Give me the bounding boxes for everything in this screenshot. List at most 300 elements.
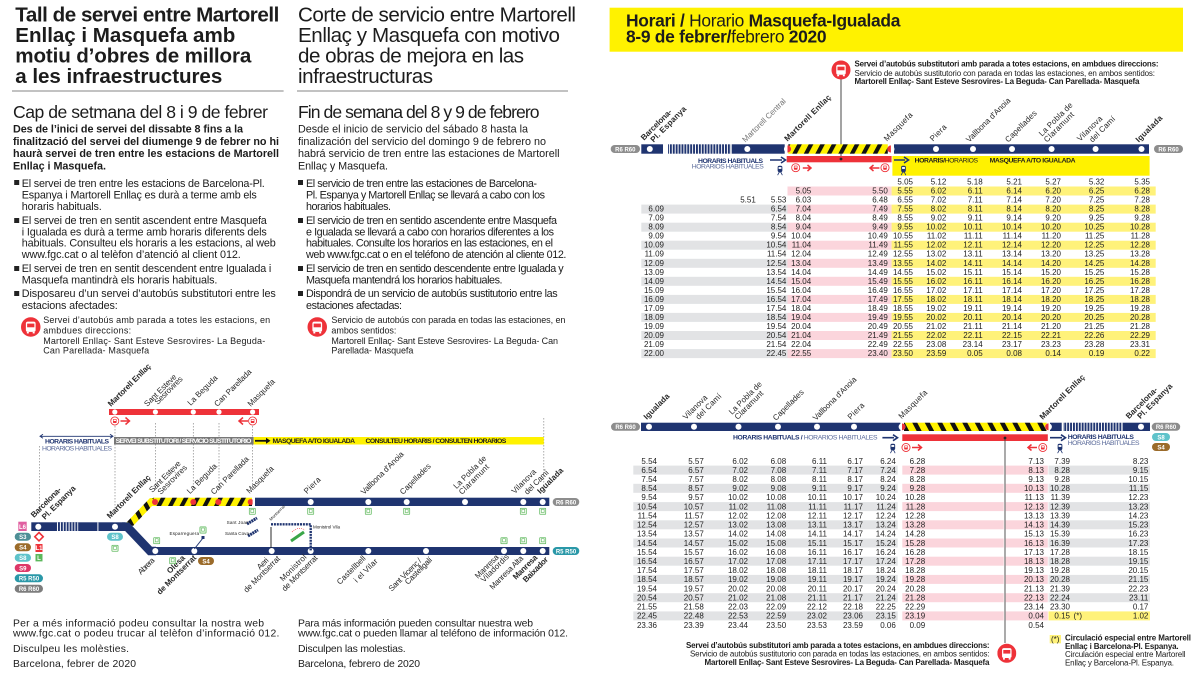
timetable: direction Igualada: 20.09	[644, 331, 665, 340]
bullet list: Spanish: El servicio de tren entre las estaciones de Barcelona-	[306, 178, 537, 190]
timetable: direction Igualada: 10.09	[644, 241, 665, 250]
timetable: direction Barcelona: 12.17	[843, 512, 864, 520]
intro paragraph: Catalan: finalització del servei del diumenge 9 de febrer no hi	[13, 136, 279, 148]
timetable: direction Igualada: 7.54	[771, 214, 787, 223]
bullet list: Spanish: horarios habituales.	[306, 201, 391, 213]
station labels: direction Barcelona: Martorell Enllaç	[1038, 372, 1087, 421]
timetable: direction Igualada: 5.27	[1045, 178, 1062, 186]
timetable: direction Barcelona: 14.08	[766, 530, 787, 539]
title: Catalan: motiu d’obres de millora	[15, 44, 252, 68]
title: Catalan: Enllaç i Masquefa amb	[15, 24, 235, 47]
timetable: direction Igualada: 20.55	[893, 322, 914, 331]
timetable: direction Igualada: 10.02	[926, 223, 947, 232]
timetable: direction Barcelona: 8.24	[880, 475, 896, 484]
timetable: direction Barcelona: 20.54	[637, 594, 658, 602]
timetable: direction Barcelona: 19.02	[728, 575, 749, 584]
timetable: direction Igualada: 5.18	[967, 178, 983, 186]
timetable: direction Barcelona: 22.13	[1024, 594, 1045, 602]
footer: Spanish: Para más información pueden consultar nuestra web	[298, 619, 533, 630]
bus callout: Catalan: Martorell Enllaç- Sant Esteve Sesrovires- La Beguda-	[43, 336, 265, 346]
timetable: direction Barcelona: 23.36	[637, 621, 658, 630]
schedule band: MASQUEFA A/TO IGUALADA	[272, 438, 355, 445]
timetable: direction Igualada: 7.02	[931, 196, 947, 205]
station labels: upper: Barcelona-	[29, 485, 63, 519]
timetable: direction Barcelona: 9.17	[847, 484, 864, 493]
timetable: direction Igualada: 7.04	[796, 205, 812, 214]
timetable: direction Barcelona: 22.18	[843, 603, 864, 612]
timetable: direction Igualada: 23.40	[868, 349, 888, 358]
timetable: direction Barcelona: 16.08	[766, 548, 787, 557]
timetable: direction Igualada: 23.50	[893, 349, 914, 358]
bus note: Masquefa direction: Servicio de autobús sustitutorio con parada en todas las estaciones, en ambos sentidos:	[854, 69, 1155, 78]
footer: Spanish: www.fgc.cat o pueden llamar al teléfono de información 012.	[297, 628, 568, 639]
timetable: direction Barcelona: 10.54	[637, 502, 658, 511]
timetable: direction Barcelona: 20.28	[1050, 575, 1071, 584]
icon: bus with leader line	[832, 60, 850, 158]
timetable: direction Igualada: 12.54	[766, 259, 787, 268]
timetable: direction Barcelona: 17.54	[637, 566, 658, 575]
station labels: lower: de Montserrat	[155, 553, 198, 596]
bus callout: Catalan	[43, 315, 270, 356]
Montserrat branches	[170, 503, 340, 551]
timetable: direction Igualada: 15.49	[868, 277, 888, 286]
bullet list: Spanish: El servicio de tren en sentido descendente entre Igualada y	[306, 263, 564, 275]
timetable: direction Igualada: 8.20	[1045, 205, 1062, 214]
timetable: direction Igualada: 16.02	[926, 277, 947, 286]
timetable: direction Igualada: 0.08	[1006, 349, 1023, 358]
station labels: upper: del Camí	[522, 468, 551, 496]
timetable: direction Barcelona: 14.11	[808, 530, 828, 539]
line legend pills: R6 R60	[19, 587, 40, 593]
timetable: direction Barcelona: 11.15	[1129, 484, 1149, 493]
timetable: direction Igualada: 8.11	[968, 205, 983, 214]
timetable: direction Igualada: 9.11	[968, 214, 983, 223]
line legend pills: S8	[111, 535, 119, 541]
timetable: direction Barcelona: 6.24	[880, 457, 896, 466]
timetable: direction Barcelona: 9.13	[1028, 475, 1045, 484]
timetable: direction Barcelona: 15.54	[637, 548, 658, 557]
timetable: direction Barcelona: 13.28	[905, 521, 926, 530]
timetable: direction Barcelona: 17.02	[728, 557, 749, 566]
service strip: direction Barcelona: HORARIOS HABITUALES	[1068, 440, 1140, 447]
timetable: direction Igualada: 10.55	[893, 232, 914, 241]
timetable: direction Barcelona: 7.24	[880, 466, 896, 475]
timetable: direction Barcelona: 17.23	[1128, 539, 1149, 548]
timetable: direction Igualada: 20.04	[791, 322, 812, 331]
dashed guide lines	[39, 418, 544, 510]
station labels: direction Igualada: Martorell Central	[740, 97, 788, 144]
timetable: direction Barcelona: 17.17	[843, 557, 864, 566]
timetable: direction Barcelona: 8.02	[732, 475, 749, 484]
timetable: direction Barcelona: 0.17	[1133, 603, 1149, 612]
replacement bus bar	[109, 409, 259, 425]
timetable: direction Igualada: 16.25	[1084, 277, 1105, 286]
station labels: direction Igualada: Pl. Espanya	[649, 104, 689, 144]
station labels: direction Barcelona	[642, 372, 1175, 422]
timetable: direction Barcelona: 5.54	[641, 457, 658, 466]
timetable: direction Igualada: 19.04	[791, 313, 812, 322]
timetable: direction Barcelona: 8.28	[910, 475, 926, 484]
station labels: direction Barcelona: Vallbona d'Anoia	[811, 375, 859, 422]
timetable: direction Barcelona: 7.57	[688, 475, 704, 484]
timetable: direction Barcelona: 23.15	[876, 612, 896, 621]
timetable: direction Barcelona: 22.09	[766, 603, 787, 612]
service strip: direction Barcelona	[733, 433, 1170, 453]
line legend pills	[15, 498, 579, 593]
timetable: direction Igualada: 0.14	[1045, 349, 1062, 358]
line legend pills: L6	[19, 525, 27, 531]
footer: Spanish	[297, 619, 568, 670]
bullet list: Catalan: habituals. Consulteu els horaris a les estacions, al web	[22, 238, 276, 250]
timetable: direction Igualada: 19.54	[766, 322, 787, 331]
timetable: direction Igualada: 13.14	[1002, 250, 1023, 259]
footer: Spanish: Disculpen las molestias.	[298, 644, 406, 655]
timetable: direction Barcelona: 9.24	[880, 484, 896, 493]
bus bar station labels: Sesrovires	[153, 375, 185, 406]
timetable: direction Barcelona: 23.59	[843, 621, 864, 630]
line legend pills: S9	[19, 566, 27, 572]
timetable: direction Barcelona: 16.28	[905, 548, 926, 557]
timetable: direction Barcelona: 12.02	[728, 512, 749, 520]
timetable: direction Igualada: 6.14	[1006, 186, 1023, 196]
station labels: lower: Abrera	[136, 556, 157, 576]
Montserrat branches: Montserrat	[268, 503, 286, 522]
timetable: direction Barcelona: 22.48	[684, 612, 704, 621]
timetable: direction Barcelona: 19.11	[808, 575, 828, 584]
footnote: special service: Enllaç y Barcelona-Pl. Espanya.	[1065, 659, 1174, 668]
timetable: direction Igualada: 14.54	[766, 277, 787, 286]
timetable: direction Barcelona: 14.17	[843, 530, 864, 539]
timetable: direction Barcelona: 22.59	[766, 612, 787, 621]
timetable: direction Barcelona: 13.11	[808, 521, 828, 530]
timetable: direction Barcelona: 10.11	[808, 493, 828, 502]
bus note: Barcelona direction: Servei d’autobús substitutori amb parada a totes estacions, en ambdues direccions:	[686, 641, 990, 650]
timetable: direction Barcelona: (*)	[1074, 612, 1082, 621]
bus note: Barcelona direction: Servicio de autobús sustitutorio con parada en todas las estaciones, en ambos sentidos:	[690, 650, 990, 659]
timetable: direction Barcelona: 16.54	[637, 557, 658, 566]
timetable: direction Barcelona: 0.09	[910, 621, 926, 630]
bus bar station labels: Can Parellada	[212, 367, 254, 408]
bus note: Masquefa direction	[854, 60, 1158, 86]
station labels: direction Barcelona: La Pobla de	[727, 379, 764, 416]
timetable: direction Igualada: 19.09	[644, 322, 665, 331]
timetable: direction Igualada: 19.02	[926, 304, 947, 313]
Montserrat branches: Monistrol Vila	[313, 524, 340, 530]
station labels: upper: Masquefa	[245, 464, 276, 495]
timetable: direction Igualada: 15.14	[1002, 268, 1023, 277]
timetable: direction Barcelona: 21.39	[1050, 584, 1071, 593]
bullet list: Spanish: Dispondrá de un servicio de autobús sustitutorio entre las	[306, 288, 558, 300]
timetable: direction Barcelona: 19.28	[905, 575, 926, 584]
timetable: direction Barcelona: 6.02	[732, 457, 749, 466]
service strip: direction Barcelona: S4	[1157, 445, 1165, 451]
timetable: direction Igualada: 6.55	[897, 196, 914, 205]
station labels: direction Igualada: Masquefa	[882, 110, 915, 143]
timetable: direction Igualada: 8.04	[796, 214, 812, 223]
timetable: direction Barcelona: 17.28	[905, 557, 926, 566]
timetable: direction Igualada: 16.28	[1130, 277, 1151, 286]
station labels: direction Igualada: Claramunt	[1042, 110, 1077, 144]
bullet list: Catalan: www.fgc.cat o al telèfon d’atenció al client 012.	[21, 249, 241, 261]
line legend pills: S4	[202, 559, 210, 565]
timetable: direction Igualada: 22.11	[963, 331, 983, 340]
timetable: direction Barcelona: 18.54	[637, 575, 658, 584]
timetable: direction Barcelona: 10.08	[766, 493, 787, 502]
timetable: direction Barcelona: 22.45	[637, 612, 658, 621]
bus bar station labels: Martorell Enllaç	[106, 361, 153, 408]
header band: timetable title: Horari / Horario Masquefa-Igualada	[626, 11, 901, 31]
timetable: direction Barcelona: 18.02	[728, 566, 749, 575]
station labels: direction Igualada: Martorell Enllaç	[783, 93, 833, 143]
timetable: direction Barcelona: 8.54	[641, 484, 658, 493]
footnote: special service: Circulació especial entre Martorell	[1065, 634, 1191, 643]
timetable: direction Barcelona: 8.08	[771, 475, 787, 484]
station labels: lower: Manresa Alta	[488, 554, 526, 591]
bus callout: Spanish: Servicio de autobús con parada en todas las estaciones, en	[331, 315, 565, 325]
line diagram: direction Barcelona	[611, 423, 1180, 431]
bus note: Barcelona direction	[686, 641, 990, 667]
timetable: direction Barcelona: 20.08	[766, 584, 787, 593]
footnote: special service: Circulación especial entre Martorell	[1065, 650, 1186, 659]
timetable: direction Barcelona: 18.15	[1128, 548, 1149, 557]
line legend pills: L	[37, 556, 41, 562]
bus note: Masquefa direction: Martorell Enllaç- Sant Esteve Sesrovires- La Beguda- Can Parellada- Masquefa	[854, 77, 1140, 86]
station labels: upper: La Pobla de	[452, 454, 489, 491]
line diagram: direction Igualada	[611, 144, 1183, 154]
timetable: direction Igualada: 13.02	[926, 250, 947, 259]
timetable: direction Igualada: 22.02	[926, 331, 947, 340]
station labels: direction Igualada: La Pobla de	[1037, 100, 1075, 138]
timetable: direction Igualada: 7.25	[1089, 196, 1105, 205]
timetable: direction Barcelona: 15.11	[808, 539, 828, 548]
timetable: direction Igualada: 12.55	[893, 250, 914, 259]
timetable: direction Igualada: 19.25	[1084, 304, 1105, 313]
bullet list: Spanish: habituales. Consulte los horarios en las estaciones, en el	[306, 238, 553, 250]
panel: Catalan notice	[12, 4, 284, 355]
timetable: direction Igualada: 21.25	[1084, 322, 1105, 331]
bus bar station labels: Sant Esteve	[142, 372, 179, 408]
timetable: direction Igualada: 16.14	[1002, 277, 1023, 286]
timetable: direction Barcelona: 23.44	[728, 621, 749, 630]
timetable: direction Barcelona: 7.08	[771, 466, 787, 475]
timetable: direction Igualada: 12.28	[1130, 241, 1151, 250]
line: main stem and lower branch	[31, 522, 549, 555]
timetable: direction Barcelona: 6.54	[641, 466, 658, 475]
timetable: direction Barcelona: 8.57	[688, 484, 704, 493]
timetable: direction Igualada: 16.20	[1041, 277, 1062, 286]
timetable: direction Igualada: 22.21	[1041, 331, 1062, 340]
station labels: lower: i el Vilar	[352, 557, 380, 584]
station labels: upper: Piera	[302, 475, 323, 496]
timetable: direction Igualada: 23.17	[1002, 340, 1023, 349]
timetable: direction Barcelona: 9.28	[1054, 475, 1071, 484]
timetable: direction Igualada: 21.28	[1130, 322, 1151, 331]
timetable: direction Igualada: 12.04	[791, 250, 812, 259]
timetable: direction Barcelona: 19.13	[1024, 566, 1045, 575]
timetable: direction Barcelona: 18.28	[1050, 557, 1071, 566]
timetable: direction Igualada: 23.08	[926, 340, 947, 349]
timetable: direction Barcelona: 9.11	[812, 484, 828, 493]
timetable: direction Igualada: 18.09	[644, 313, 665, 322]
timetable: direction Igualada: 12.25	[1084, 241, 1105, 250]
timetable: direction Igualada: 15.04	[791, 277, 812, 286]
timetable: direction Igualada: 6.25	[1089, 186, 1105, 196]
timetable: direction Barcelona: 15.23	[1128, 521, 1149, 530]
bullet list: Catalan: Masquefa mantindrà els horaris habituals.	[22, 274, 217, 286]
service strip: direction Barcelona: HORARIS HABITUALS / HORARIOS HABITUALES	[733, 434, 878, 441]
service strip: direction Igualada: HORARIS/HORARIOS	[915, 158, 978, 164]
timetable: direction Barcelona: 11.02	[729, 502, 749, 511]
timetable: direction Igualada: 18.25	[1084, 295, 1105, 304]
timetable: direction Barcelona: 20.28	[905, 584, 926, 593]
bullet list: Spanish: web www.fgc.cat o en el teléfono de atención al cliente 012.	[305, 249, 566, 261]
timetable: direction Barcelona: 0.15	[1054, 612, 1071, 621]
timetable: direction Igualada: 14.20	[1041, 259, 1062, 268]
timetable: direction Barcelona: 11.57	[684, 512, 704, 520]
timetable: direction Igualada: 17.09	[644, 304, 665, 313]
bullet list: Catalan	[14, 178, 276, 312]
timetable: direction Igualada: 7.11	[968, 196, 983, 205]
timetable: direction Barcelona: 23.14	[1024, 603, 1045, 612]
timetable: direction Barcelona: 17.57	[684, 566, 704, 575]
timetable: direction Igualada: 15.25	[1084, 268, 1105, 277]
timetable: direction Igualada: 5.05	[796, 186, 812, 196]
intro paragraph: Catalan: Des de l’inici de servei del dissabte 8 fins a la	[13, 124, 244, 136]
timetable: direction Igualada: 17.14	[1002, 286, 1023, 295]
timetable: direction Igualada: 5.21	[1006, 178, 1023, 186]
timetable: direction Barcelona: 14.23	[1128, 512, 1149, 520]
timetable: direction Igualada: 21.04	[791, 331, 812, 340]
timetable: direction Igualada: 8.54	[771, 223, 787, 232]
timetable: direction Barcelona: 12.23	[1128, 493, 1149, 502]
bullet list: Catalan: i Igualada es durà a terme amb horaris diferents dels	[22, 226, 267, 238]
station labels: upper	[29, 449, 566, 521]
bullet list: Catalan: El servei de tren entre les estacions de Barcelona-Pl.	[22, 178, 265, 190]
timetable: direction Barcelona: 13.23	[1128, 502, 1149, 511]
timetable: direction Igualada: 16.04	[791, 286, 812, 295]
timetable: direction Barcelona: 11.17	[844, 502, 864, 511]
Montserrat branches: Santa Cova	[225, 531, 249, 536]
title: Spanish: de obras de mejora en las	[298, 44, 524, 68]
timetable: direction Igualada: 17.02	[926, 286, 947, 295]
timetable: direction Igualada: 12.20	[1041, 241, 1062, 250]
line legend pills: R5 R50	[556, 549, 577, 555]
timetable: direction Igualada: 7.55	[897, 205, 914, 214]
intro paragraph: Spanish: Enllaç y Masquefa.	[298, 160, 388, 172]
timetable: direction Barcelona: 10.28	[1050, 484, 1071, 493]
timetable: direction Igualada: 6.48	[872, 196, 888, 205]
timetable: direction Barcelona: 18.13	[1024, 557, 1045, 566]
timetable: direction Igualada: 10.11	[963, 223, 983, 232]
timetable: direction Igualada: 16.09	[644, 295, 665, 304]
timetable: direction Igualada: 19.11	[963, 304, 983, 313]
timetable: direction Barcelona: 7.28	[910, 466, 926, 475]
header band: timetable title	[610, 8, 1183, 52]
timetable: direction Igualada: 19.14	[1002, 304, 1023, 313]
timetable: direction Barcelona: 10.57	[684, 502, 704, 511]
station labels: direction Barcelona: del Camí	[694, 391, 724, 421]
timetable: direction Barcelona: 21.15	[1128, 575, 1149, 584]
timetable: direction Barcelona: 23.39	[684, 621, 704, 630]
station labels: upper: Igualada	[535, 466, 566, 496]
line legend pills: L1	[35, 546, 43, 552]
timetable: direction Barcelona: 11.11	[808, 502, 828, 511]
timetable: direction Barcelona: 6.08	[771, 457, 787, 466]
timetable: direction Igualada: 12.11	[963, 241, 983, 250]
service strip: direction Barcelona: S8	[1157, 435, 1165, 441]
timetable: direction Barcelona: 13.24	[876, 521, 896, 530]
station labels: lower: Aeri	[255, 556, 271, 571]
timetable: direction Barcelona: 7.39	[1054, 457, 1071, 466]
timetable: direction Barcelona: 7.54	[641, 475, 658, 484]
timetable: direction Igualada: 15.11	[963, 268, 983, 277]
station labels: lower: Manresa	[473, 552, 501, 580]
timetable: direction Barcelona: 19.24	[876, 575, 896, 584]
header band: timetable title: 8-9 de febrer/febrero 2020	[626, 27, 827, 47]
timetable: direction Igualada	[641, 178, 1156, 358]
station labels: direction Barcelona: Capellades	[771, 388, 806, 422]
intro paragraph: Spanish	[298, 124, 560, 172]
timetable: direction Igualada: 7.14	[1006, 196, 1023, 205]
bullet list: Catalan: El servei de tren en sentit descendent entre Igualada i	[22, 263, 271, 275]
bullet list: Catalan: estacions afectades:	[22, 300, 118, 312]
timetable: direction Igualada: 22.04	[791, 340, 812, 349]
timetable: direction Igualada: 8.14	[1006, 205, 1023, 214]
timetable: direction Barcelona: 23.50	[766, 621, 787, 630]
timetable: direction Igualada: 5.50	[872, 186, 888, 196]
title: Spanish: Corte de servicio entre Martorell	[298, 4, 576, 27]
station labels: lower: Olesa	[165, 553, 187, 575]
timetable: direction Igualada: 8.49	[872, 214, 888, 223]
timetable: direction Igualada: 10.14	[1002, 223, 1023, 232]
timetable: direction Igualada: 20.49	[868, 322, 888, 331]
timetable: direction Igualada: 14.55	[893, 268, 914, 277]
timetable: direction Barcelona: 20.24	[876, 584, 896, 593]
timetable: direction Barcelona: 14.28	[905, 530, 926, 539]
timetable: direction Barcelona: 7.13	[1028, 457, 1045, 466]
station labels: direction Igualada: Igualada	[1134, 113, 1165, 144]
service strip: direction Igualada: HORARIOS HABITUALES	[692, 163, 764, 170]
timetable: direction Igualada: 22.55	[893, 340, 914, 349]
timetable: direction Igualada: 5.35	[1134, 178, 1151, 186]
timetable: direction Igualada: 21.09	[644, 340, 665, 349]
timetable: direction Barcelona: 11.08	[767, 502, 787, 511]
timetable: direction Igualada: 10.04	[791, 232, 812, 241]
timetable: direction Igualada: 10.49	[868, 232, 888, 241]
station labels: direction Barcelona: Piera	[846, 401, 867, 421]
line diagram: direction Igualada: R6 R60	[615, 147, 636, 153]
service strip: direction Igualada: MASQUEFA A/TO IGUALADA	[990, 158, 1076, 164]
timetable: direction Barcelona: 9.08	[771, 484, 787, 493]
timetable: direction Barcelona: 13.13	[1024, 512, 1045, 520]
timetable: direction Igualada: 22.15	[1002, 331, 1023, 340]
bus bar station labels: Masquefa	[246, 377, 277, 408]
timetable: direction Igualada: 9.25	[1089, 214, 1105, 223]
timetable: direction Igualada: 21.20	[1041, 322, 1062, 331]
timetable: direction Barcelona: 21.55	[637, 603, 658, 612]
timetable: direction Igualada: 23.59	[926, 349, 947, 358]
timetable: direction Barcelona: 12.57	[684, 521, 704, 530]
bus bar station labels	[106, 361, 277, 408]
station labels: upper: Capellades	[398, 462, 433, 496]
timetable: direction Igualada: 11.09	[645, 250, 665, 259]
timetable: direction Igualada: 9.14	[1006, 214, 1023, 223]
timetable: direction Igualada: 19.20	[1041, 304, 1062, 313]
timetable: direction Igualada: 15.28	[1130, 268, 1151, 277]
timetable: direction Igualada: 17.11	[963, 286, 983, 295]
station labels: lower: Manresa	[511, 553, 540, 581]
station labels: lower: de Montserrat	[242, 554, 283, 594]
